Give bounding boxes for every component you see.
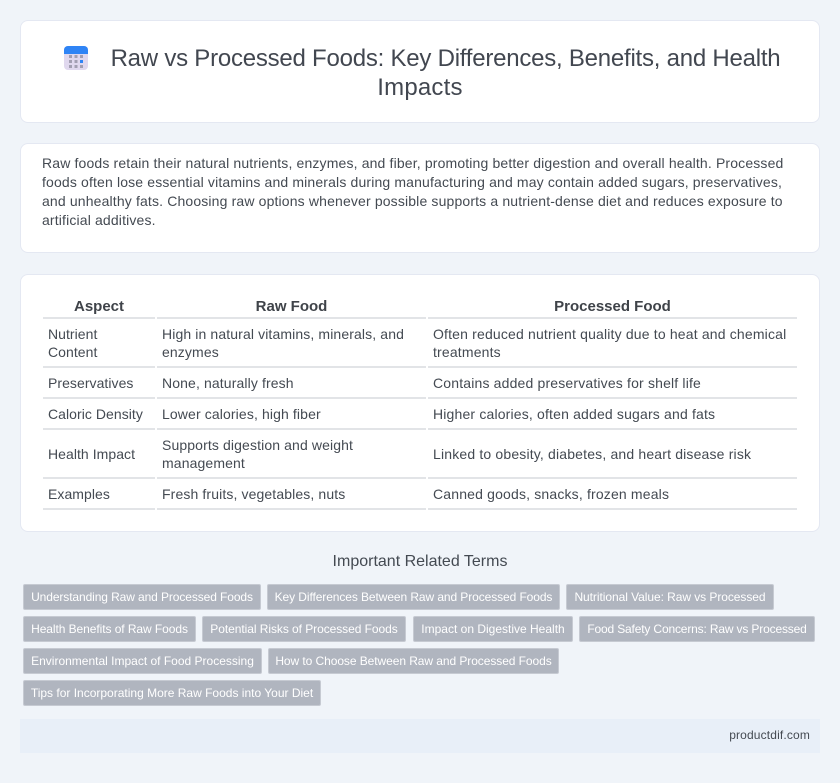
related terms tags: Tips for Incorporating More Raw Foods into Your Diet — [31, 686, 313, 700]
comparison table: Lower calories, high fiber — [162, 406, 321, 422]
comparison table: Supports digestion and weight — [162, 437, 353, 453]
comparison table: None, naturally fresh — [162, 375, 294, 391]
related terms tags: Impact on Digestive Health — [421, 622, 565, 636]
related terms tags: Nutritional Value: Raw vs Processed — [574, 590, 766, 604]
comparison table: Linked to obesity, diabetes, and heart disease risk — [433, 446, 751, 462]
related terms heading: Important Related Terms — [333, 553, 507, 570]
comparison table panel — [20, 274, 820, 532]
comparison table: High in natural vitamins, minerals, and — [162, 326, 404, 342]
comparison table: Raw Food — [256, 298, 327, 315]
intro text: Raw foods retain their natural nutrients, enzymes, and fiber, promoting better digestion and overall health. Processed — [42, 155, 783, 171]
comparison table: Preservatives — [48, 375, 133, 391]
comparison table: Content — [48, 344, 97, 360]
comparison table — [43, 298, 797, 510]
title — [111, 45, 780, 101]
footer source: productdif.com — [729, 728, 810, 742]
related terms tags: Potential Risks of Processed Foods — [210, 622, 398, 636]
comparison table: Fresh fruits, vegetables, nuts — [162, 486, 345, 502]
icon: calendar — [64, 46, 88, 70]
related terms tags: How to Choose Between Raw and Processed Foods — [275, 654, 552, 668]
footer bar — [20, 719, 820, 753]
comparison table: Canned goods, snacks, frozen meals — [433, 486, 669, 502]
intro text: and unhealthy fats. Choosing raw options whenever possible supports a nutrient-dense diet and reduces exposure to — [42, 193, 783, 209]
header panel — [20, 20, 820, 123]
title: Impacts — [377, 74, 463, 101]
related terms tags: Key Differences Between Raw and Processed Foods — [275, 590, 552, 604]
related terms tags: Food Safety Concerns: Raw vs Processed — [587, 622, 807, 636]
related terms tags: Health Benefits of Raw Foods — [31, 622, 188, 636]
comparison table: Processed Food — [554, 298, 671, 315]
comparison table: Health Impact — [48, 446, 135, 462]
related terms tags — [23, 584, 815, 706]
comparison table: management — [162, 455, 245, 471]
related terms tags: Environmental Impact of Food Processing — [31, 654, 254, 668]
comparison table: Higher calories, often added sugars and fats — [433, 406, 715, 422]
comparison table: Often reduced nutrient quality due to heat and chemical — [433, 326, 786, 342]
comparison table: Contains added preservatives for shelf life — [433, 375, 701, 391]
comparison table: treatments — [433, 344, 501, 360]
comparison table: enzymes — [162, 344, 219, 360]
intro text: foods often lose essential vitamins and minerals during manufacturing and may contain added sugars, preservatives, — [42, 174, 782, 190]
related terms tags: Understanding Raw and Processed Foods — [31, 590, 253, 604]
comparison table: Nutrient — [48, 326, 97, 342]
comparison table: Aspect — [74, 298, 124, 315]
intro text: artificial additives. — [42, 212, 156, 228]
intro panel — [20, 143, 820, 253]
title: Raw vs Processed Foods: Key Differences, Benefits, and Health — [111, 45, 780, 72]
comparison table: Examples — [48, 486, 110, 502]
comparison table: Caloric Density — [48, 406, 143, 422]
intro text — [42, 155, 783, 228]
